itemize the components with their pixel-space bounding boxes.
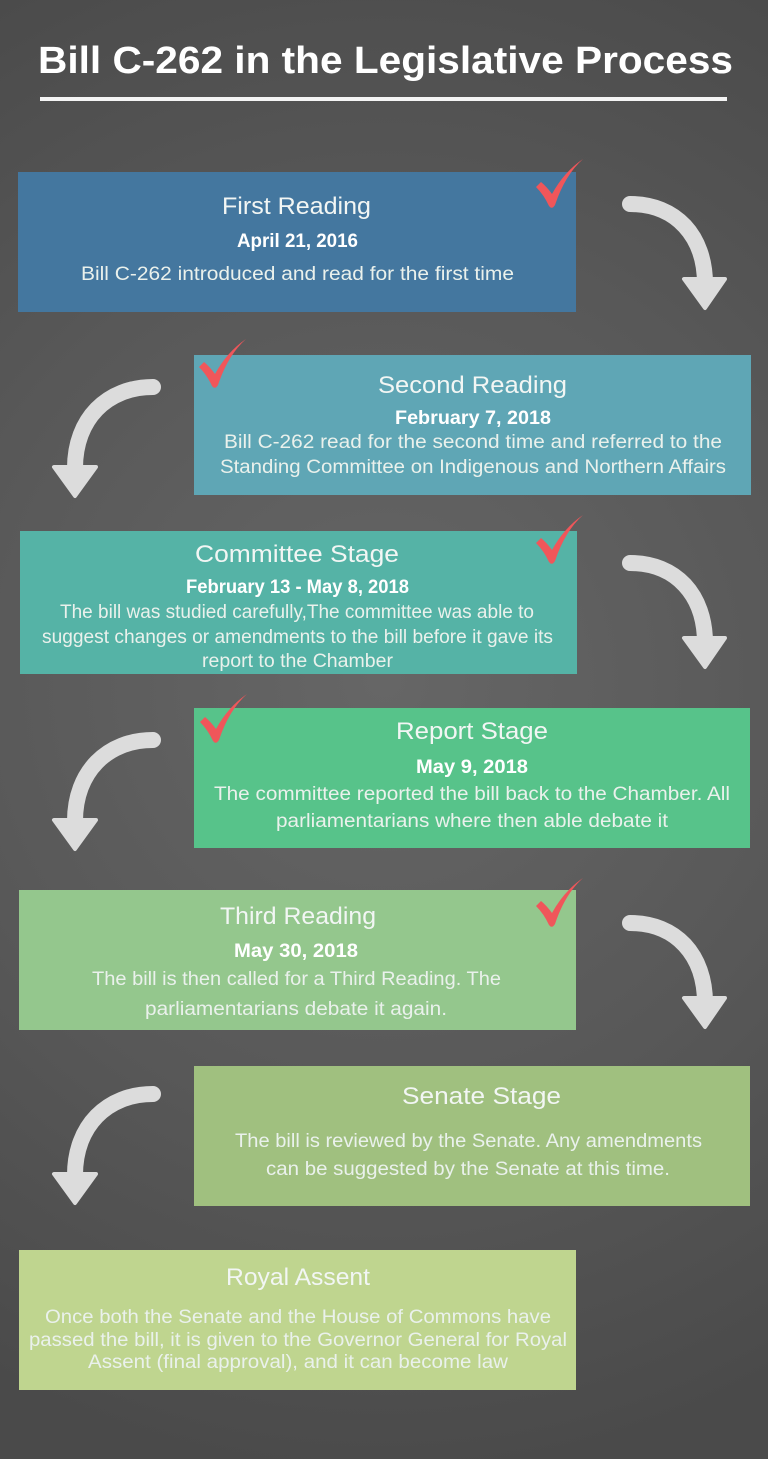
- date: February 7, 2018: February 7, 2018: [395, 408, 551, 429]
- arrow: first to second: [630, 204, 725, 308]
- description: [220, 432, 726, 478]
- description: can be suggested by the Senate at this time.: [266, 1159, 670, 1180]
- date: April 21, 2016: April 21, 2016: [237, 231, 358, 252]
- heading: Royal Assent: Royal Assent: [226, 1264, 370, 1291]
- icon: check mark 4: [200, 694, 247, 743]
- icon: check mark 5: [536, 878, 583, 927]
- description: The bill is then called for a Third Reading. The: [92, 969, 501, 990]
- description: Standing Committee on Indigenous and Northern Affairs: [220, 457, 726, 478]
- description: report to the Chamber: [202, 651, 394, 672]
- date: May 9, 2018: May 9, 2018: [416, 757, 528, 778]
- arrow: second to committee: [54, 387, 153, 496]
- icon: check mark 1: [536, 159, 583, 208]
- heading: Second Reading: Second Reading: [378, 372, 567, 399]
- panel: Third Reading: [19, 890, 576, 1030]
- description: Bill C-262 read for the second time and referred to the: [224, 432, 722, 453]
- title: Bill C-262 in the Legislative Process: [38, 40, 733, 82]
- heading: Third Reading: Third Reading: [220, 903, 376, 930]
- panel: Senate Stage: [194, 1066, 750, 1206]
- description: [214, 784, 730, 832]
- arrow: senate to royal assent: [54, 1094, 153, 1203]
- arrow: third to senate: [630, 923, 725, 1027]
- description: [235, 1131, 702, 1180]
- description: Once both the Senate and the House of Commons have: [45, 1307, 551, 1328]
- description: The bill was studied carefully,The committee was able to: [60, 602, 534, 623]
- description: The committee reported the bill back to the Chamber. All: [214, 784, 730, 805]
- arrow: committee to report: [630, 563, 725, 667]
- description: parliamentarians where then able debate it: [276, 811, 669, 832]
- description: parliamentarians debate it again.: [145, 999, 447, 1020]
- description: [29, 1307, 567, 1373]
- description: passed the bill, it is given to the Governor General for Royal: [29, 1330, 567, 1351]
- title underline: [40, 97, 727, 101]
- heading: First Reading: First Reading: [222, 193, 371, 220]
- icon: check mark 3: [536, 515, 583, 564]
- panel: Report Stage: [194, 708, 750, 848]
- description: suggest changes or amendments to the bill before it gave its: [42, 627, 553, 648]
- description: Assent (final approval), and it can become law: [88, 1352, 508, 1373]
- panel: First Reading: [18, 172, 576, 312]
- description: Bill C-262 introduced and read for the first time: [81, 264, 514, 285]
- panel: Committee Stage: [20, 531, 577, 674]
- description: [42, 602, 553, 672]
- arrow: report to third: [54, 740, 153, 849]
- date: May 30, 2018: May 30, 2018: [234, 941, 358, 962]
- heading: Senate Stage: Senate Stage: [402, 1083, 561, 1110]
- panel: Second Reading: [194, 355, 751, 495]
- description: The bill is reviewed by the Senate. Any amendments: [235, 1131, 702, 1152]
- description: [92, 969, 501, 1020]
- heading: Committee Stage: Committee Stage: [195, 541, 399, 568]
- icon: check mark 2: [199, 339, 246, 388]
- panel: Royal Assent: [19, 1250, 576, 1390]
- heading: Report Stage: Report Stage: [396, 718, 548, 745]
- date: February 13 - May 8, 2018: February 13 - May 8, 2018: [186, 577, 409, 598]
